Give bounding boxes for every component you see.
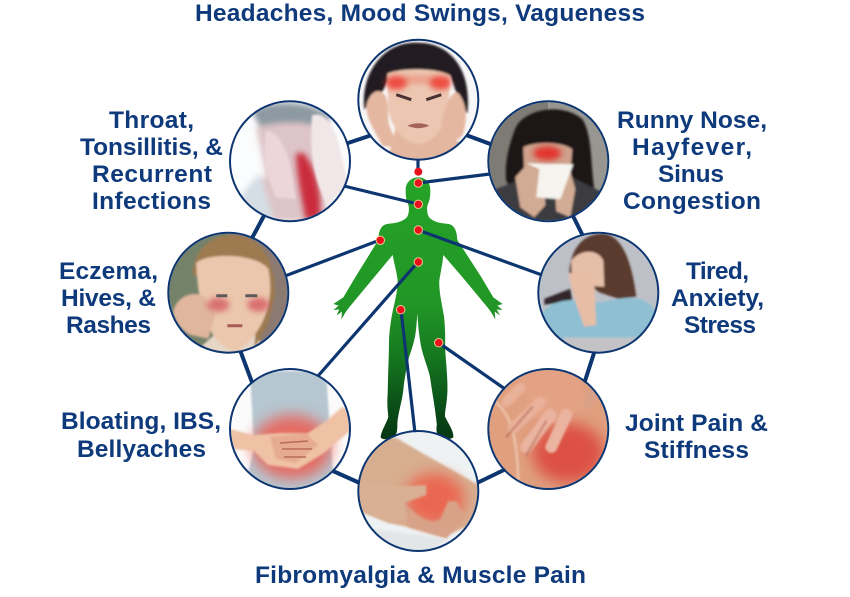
label: joint pain xyxy=(625,410,768,464)
label: bloating: Bloating, IBS, xyxy=(61,408,221,435)
label: runny nose: Hayfever, xyxy=(632,134,752,161)
photo: joint pain xyxy=(488,367,608,489)
label: tired xyxy=(671,258,764,339)
body pain points xyxy=(376,168,443,347)
ring connectors between photos xyxy=(240,135,595,484)
label: eczema: Eczema, xyxy=(59,258,158,285)
label: runny nose: Sinus xyxy=(658,161,724,188)
human body figure xyxy=(333,177,503,439)
photo: headache xyxy=(358,40,478,160)
label: throat: Tonsillitis, & xyxy=(80,134,223,161)
label: eczema: Rashes xyxy=(66,312,151,339)
label: throat: Recurrent xyxy=(92,161,212,188)
label: bloating xyxy=(61,408,221,463)
label: tired: Stress xyxy=(684,312,756,339)
label: bloating: Bellyaches xyxy=(77,436,206,463)
label: throat: Throat, xyxy=(109,107,194,134)
heading: headaches: Headaches, Mood Swings, Vagueness xyxy=(195,0,645,27)
label: tired: Anxiety, xyxy=(671,285,764,312)
label: eczema: Hives, & xyxy=(61,285,156,312)
label: fibromyalgia: Fibromyalgia & Muscle Pain xyxy=(255,562,586,589)
label: eczema xyxy=(59,258,158,339)
label: throat xyxy=(80,107,223,215)
label: runny nose xyxy=(617,107,767,215)
label: joint pain: Joint Pain & xyxy=(625,410,768,437)
label: throat: Infections xyxy=(92,188,211,215)
label: joint pain: Stiffness xyxy=(644,437,749,464)
label: runny nose: Runny Nose, xyxy=(617,107,767,134)
photo: bloating xyxy=(230,369,350,489)
photo: throat xyxy=(230,101,350,221)
photo: tired xyxy=(538,233,658,354)
leader lines from body to photos xyxy=(285,158,542,433)
photo: eczema xyxy=(168,233,288,353)
photo: runny nose xyxy=(488,101,608,221)
label: tired: Tired, xyxy=(686,258,749,285)
photo: muscle pain xyxy=(358,431,478,551)
label: runny nose: Congestion xyxy=(623,188,761,215)
